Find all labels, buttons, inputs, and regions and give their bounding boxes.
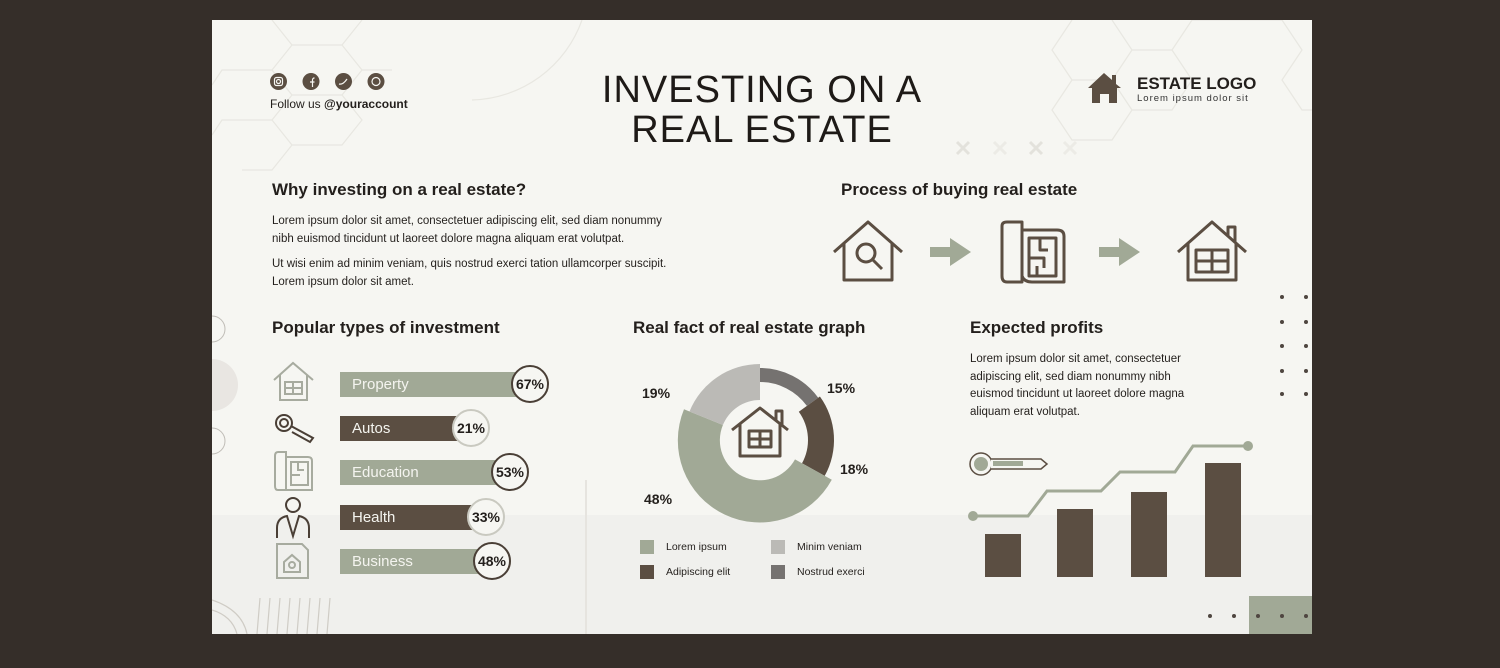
title: INVESTING ON A <box>602 69 922 111</box>
panel: process of buying <box>833 180 1247 284</box>
title: REAL ESTATE <box>631 109 893 151</box>
icon: key <box>276 415 313 442</box>
icon: person <box>277 498 309 538</box>
panel: popular types: Property <box>352 376 409 393</box>
panel: popular types: 67% <box>516 376 544 392</box>
panel: real fact graph: 48% <box>644 491 672 507</box>
arrow 1 <box>930 238 971 266</box>
panel: real fact graph: 18% <box>840 461 868 477</box>
title <box>602 69 922 151</box>
legend: Nostrud exerci <box>797 566 865 578</box>
panel: why investing <box>272 180 666 288</box>
icon: blueprint <box>1002 222 1064 282</box>
paragraphs <box>272 215 666 288</box>
arrow 2 <box>1099 238 1140 266</box>
logo <box>1088 73 1256 104</box>
logo: Lorem ipsum dolor sit <box>1137 93 1249 104</box>
panel: popular types: 33% <box>472 509 500 525</box>
panel: popular types: 48% <box>478 553 506 569</box>
panel: popular types: Health <box>352 509 395 526</box>
donut chart <box>678 364 1042 522</box>
follow text: Follow us @youraccount <box>270 97 408 111</box>
panel: expected profits: adipiscing elit, sed diam nonummy nibh <box>970 370 1171 382</box>
icon: blueprint <box>275 452 312 490</box>
panel: popular types: Business <box>352 553 413 570</box>
legend: Minim veniam <box>797 541 862 553</box>
panel: real fact graph: Real fact of real estate graph <box>633 318 865 337</box>
bar: property <box>340 365 549 403</box>
legend: Adipiscing elit <box>666 566 730 578</box>
icon: document house <box>277 544 308 578</box>
bar: education <box>340 453 529 491</box>
panel: real fact graph <box>633 318 974 579</box>
legend <box>640 540 865 579</box>
panel: expected profits <box>968 318 1253 577</box>
icon: house <box>274 363 313 400</box>
legend: Lorem ipsum <box>666 541 727 553</box>
paragraphs: Ut wisi enim ad minim veniam, quis nostrud exerci tation ullamcorper suscipit. <box>272 258 666 270</box>
panel: expected profits: euismod tincidunt ut laoreet dolore magna <box>970 388 1184 400</box>
logo: ESTATE LOGO <box>1137 74 1256 93</box>
card background <box>212 20 1312 634</box>
panel: expected profits: Expected profits <box>970 318 1103 337</box>
icon: house search <box>834 222 902 280</box>
profit chart <box>968 441 1253 577</box>
labels: 19% <box>642 385 670 401</box>
panel: popular types: Education <box>352 464 419 481</box>
paragraphs: Lorem ipsum dolor sit amet. <box>272 276 414 288</box>
bar: business <box>340 542 511 580</box>
social icons <box>270 73 408 111</box>
panel: why investing: Why investing on a real estate? <box>272 180 526 199</box>
bar: autos <box>340 409 490 447</box>
panel: process of buying: Process of buying real estate <box>841 180 1077 199</box>
icon: house logo <box>1088 73 1121 103</box>
icon: house window <box>1178 222 1246 280</box>
panel: real fact graph: 15% <box>827 380 855 396</box>
bar: health <box>340 498 505 536</box>
paragraphs: nibh euismod tincidunt ut laoreet dolore magna aliquam erat volutpat. <box>272 233 624 245</box>
panel: expected profits: Lorem ipsum dolor sit amet, consectetuer <box>970 353 1181 365</box>
panel: popular types: 53% <box>496 464 524 480</box>
panel: popular types: Popular types of investment <box>272 318 500 337</box>
panel: popular types: 21% <box>457 420 485 436</box>
panel: expected profits: aliquam erat volutpat. <box>970 406 1080 418</box>
panel: popular types <box>272 318 549 580</box>
panel: popular types: Autos <box>352 420 390 437</box>
paragraphs: Lorem ipsum dolor sit amet, consectetuer adipiscing elit, sed diam nonummy <box>272 215 662 227</box>
